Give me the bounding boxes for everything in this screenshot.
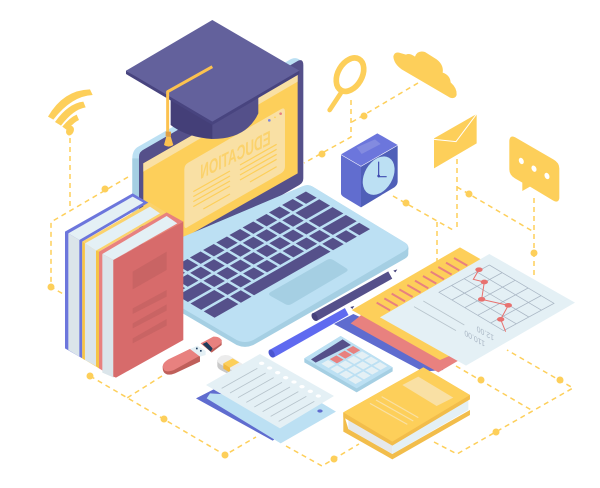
icon: magnifier xyxy=(330,53,369,110)
laptop xyxy=(132,58,408,347)
icon: wifi xyxy=(48,89,93,137)
yellow sheet with ruler stripes xyxy=(352,247,563,360)
eraser xyxy=(217,355,245,377)
laptop screen: EDUCATION xyxy=(200,126,271,184)
icon: envelope xyxy=(434,114,477,168)
graduation cap xyxy=(126,20,299,147)
laptop base and keyboard xyxy=(150,185,408,347)
laptop screen xyxy=(132,58,303,270)
alarm clock xyxy=(341,133,401,207)
dashed connector network xyxy=(48,83,573,466)
icon: cloud xyxy=(393,52,457,98)
calculator xyxy=(304,336,393,392)
pens xyxy=(267,269,397,359)
red sheet xyxy=(351,313,458,372)
yellow notebook xyxy=(343,367,470,459)
book: blue xyxy=(65,193,148,358)
clipboard xyxy=(196,354,336,443)
book: yellow xyxy=(82,203,166,368)
chart paper xyxy=(380,254,575,366)
document stack with chart xyxy=(334,247,575,372)
blue sheet xyxy=(334,314,443,372)
icon: chat bubble xyxy=(509,137,559,202)
stack of books xyxy=(65,193,183,378)
usb stick xyxy=(163,337,222,375)
book: red xyxy=(99,212,183,378)
chart paper: 110.00 xyxy=(464,327,485,349)
chart paper: 12.00 xyxy=(476,323,494,343)
